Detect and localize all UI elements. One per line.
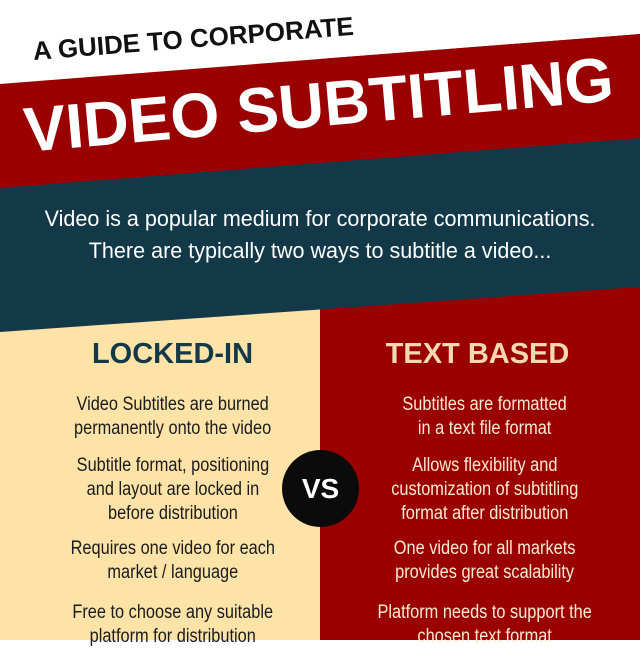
point 1: Subtitles are formatted bbox=[403, 394, 567, 415]
title: small: A GUIDE TO CORPORATE bbox=[32, 11, 355, 66]
point 3: provides great scalability bbox=[396, 562, 574, 583]
point 4: Platform needs to support the bbox=[378, 602, 592, 623]
point 3: Requires one video for each bbox=[70, 538, 275, 559]
point 2: Allows flexibility and bbox=[412, 455, 558, 476]
point 2 bbox=[76, 455, 269, 524]
point 3 bbox=[70, 538, 275, 583]
point 2 bbox=[391, 455, 579, 524]
point 3: market / language bbox=[107, 562, 238, 583]
intro text: Video is a popular medium for corporate communications. bbox=[45, 206, 595, 231]
heading: text based: TEXT BASED bbox=[386, 338, 569, 370]
point 3 bbox=[394, 538, 576, 583]
point 2: and layout are locked in bbox=[86, 479, 259, 500]
point 2: before distribution bbox=[108, 503, 237, 524]
vs badge bbox=[282, 450, 359, 527]
point 1 bbox=[74, 394, 271, 439]
text based points bbox=[378, 394, 592, 647]
point 2: customization of subtitling bbox=[391, 479, 579, 500]
point 1: in a text file format bbox=[418, 418, 552, 439]
point 4: Free to choose any suitable bbox=[72, 602, 273, 623]
vs badge: VS bbox=[302, 473, 339, 504]
point 1: Video Subtitles are burned bbox=[76, 394, 269, 415]
point 4: platform for distribution bbox=[89, 626, 256, 647]
intro text: There are typically two ways to subtitle a video... bbox=[89, 238, 551, 263]
heading: locked-in: LOCKED-IN bbox=[92, 338, 253, 370]
point 2: format after distribution bbox=[401, 503, 569, 524]
point 4 bbox=[378, 602, 592, 647]
point 1: permanently onto the video bbox=[74, 418, 271, 439]
point 1 bbox=[403, 394, 567, 439]
point 4 bbox=[72, 602, 273, 647]
intro text bbox=[44, 206, 595, 263]
point 2: Subtitle format, positioning bbox=[76, 455, 269, 476]
point 4: chosen text format bbox=[418, 626, 552, 647]
title: main: VIDEO SUBTITLING bbox=[21, 45, 616, 166]
point 3: One video for all markets bbox=[394, 538, 576, 559]
locked-in points bbox=[70, 394, 275, 647]
